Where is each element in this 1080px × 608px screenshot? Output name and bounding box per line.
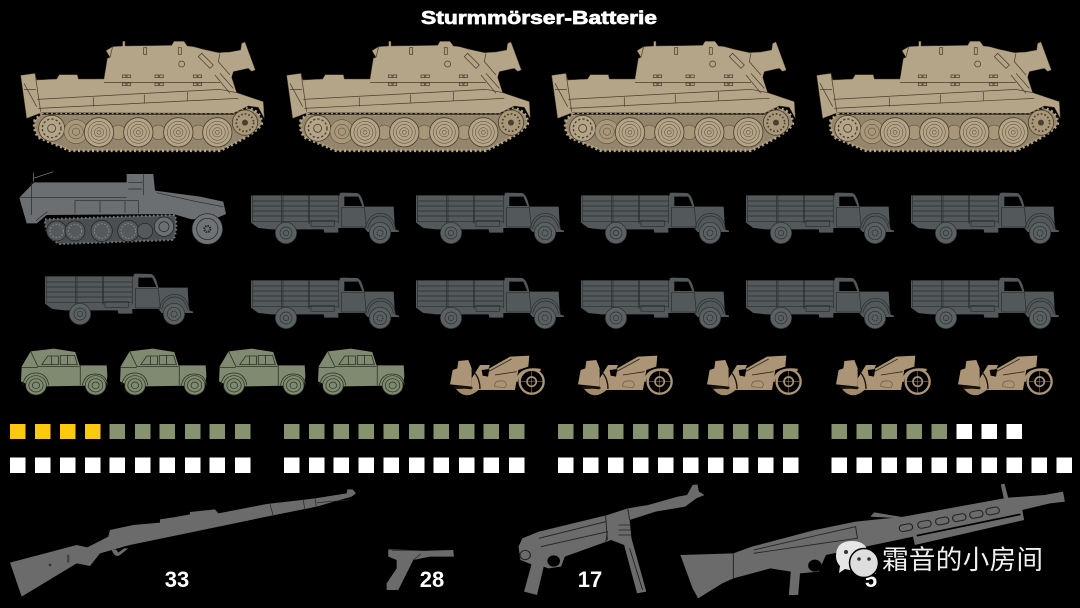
watermark text: 霜音的小房间	[882, 545, 1043, 575]
icon: truck row 1, 2	[416, 193, 564, 244]
icon: assault mortar tank 1	[21, 41, 264, 151]
icon: car 1	[21, 349, 108, 395]
icon: car 2	[120, 349, 207, 395]
count: pistols: 28	[420, 567, 444, 592]
icon: motorcycle 3	[707, 356, 801, 395]
icon: motorcycle 5	[958, 356, 1052, 395]
icon: truck row 2, 2	[251, 278, 399, 329]
icon: chat bubbles	[836, 541, 878, 578]
count: machine guns: 5	[865, 567, 877, 592]
personnel squares row 1	[10, 424, 1022, 439]
personnel squares row 2	[10, 458, 1072, 473]
icon: submachine gun	[519, 484, 704, 595]
icon: truck row 2, 3	[416, 278, 564, 329]
icon: car 3	[219, 349, 306, 395]
count: submachine guns: 17	[578, 567, 602, 592]
icon: car 4	[318, 349, 405, 395]
icon: assault mortar tank 2	[287, 41, 530, 151]
count: rifles: 33	[165, 567, 189, 592]
icon: assault mortar tank 4	[817, 41, 1060, 151]
icon: truck row 2, 4	[581, 278, 729, 329]
icon: truck row 2, 6	[911, 278, 1059, 329]
title: Sturmmörser-Batterie	[421, 8, 657, 28]
icon: assault mortar tank 3	[552, 41, 795, 151]
icon: truck row 1, 4	[746, 193, 894, 244]
watermark	[836, 541, 1043, 578]
icon: motorcycle 4	[836, 356, 930, 395]
icon: pistol	[387, 549, 454, 590]
icon: motorcycle 1	[450, 356, 544, 395]
icon: truck row 2, 1	[45, 274, 193, 325]
icon: machine gun	[680, 484, 1065, 598]
icon: truck row 1, 3	[581, 193, 729, 244]
icon: truck row 1, 5	[911, 193, 1059, 244]
icon: truck row 2, 5	[746, 278, 894, 329]
icon: rifle	[10, 489, 356, 597]
icon: truck row 1, 1	[251, 193, 399, 244]
icon: motorcycle 2	[578, 356, 672, 395]
icon: half-track	[19, 172, 226, 244]
